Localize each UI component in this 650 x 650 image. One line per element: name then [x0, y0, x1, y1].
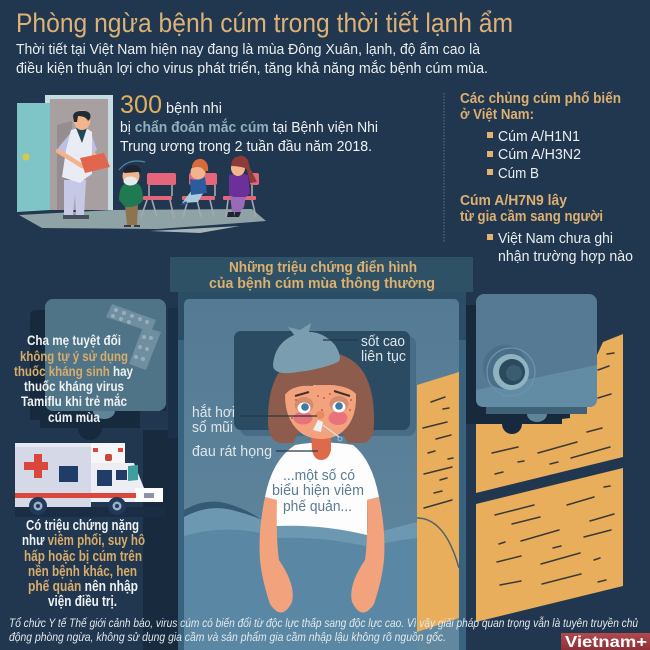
symptoms heading band — [170, 257, 473, 292]
advice text: hospitalisation: nền bệnh khác, hen — [28, 564, 137, 580]
strains list: ở Việt Nam: — [460, 107, 534, 123]
strains list: Các chủng cúm phổ biến — [460, 91, 621, 107]
pillow — [234, 331, 416, 436]
warning text: antibiotics: thuốc kháng virus — [24, 378, 124, 394]
blanket — [184, 502, 459, 650]
ice bag — [273, 323, 340, 373]
arms — [260, 497, 384, 613]
doctor — [58, 110, 110, 219]
strains list: Cúm A/H3N2 — [498, 147, 581, 163]
nose and tissue — [313, 411, 342, 441]
strains list: từ gia cầm sang người — [460, 209, 603, 225]
statistic: 300 patients — [120, 91, 378, 155]
warning text: antibiotics — [14, 332, 133, 425]
warning text: antibiotics: Cha mẹ tuyệt đối — [27, 332, 121, 348]
warning text: antibiotics: Tamiflu khi trẻ mắc — [21, 392, 127, 409]
hair — [268, 352, 374, 443]
strains list: nhận trường hợp nào — [498, 249, 633, 265]
advice text: hospitalisation: phế quản nên nhập — [28, 579, 138, 595]
left bedside table with pills — [30, 299, 166, 440]
freckles — [291, 393, 352, 419]
intro text — [16, 41, 488, 77]
shirt text: biểu hiện viêm — [272, 482, 364, 499]
right window — [476, 334, 623, 622]
symptom labels: sổ mũi — [192, 419, 233, 436]
door — [17, 103, 50, 212]
chairs — [141, 173, 259, 218]
statistic: 300 patients: Trung ương trong 2 tuần đầu năm 2018. — [120, 139, 372, 155]
symptom labels: hắt hơi — [192, 404, 235, 421]
icon: pill blisters — [106, 304, 161, 370]
footnote: động phòng ngừa, không sử dụng gia cầm và sản phẩm gia cầm nhập lậu không rõ nguồn gốc. — [9, 632, 446, 644]
warning text: antibiotics: cúm mùa — [48, 409, 100, 425]
advice text: hospitalisation: hấp hoặc bị cúm trên — [24, 549, 142, 565]
seated boy — [180, 159, 208, 205]
window reflection on panel — [417, 372, 459, 650]
door frame and room — [45, 95, 113, 210]
strains list: Việt Nam chưa ghi — [498, 231, 613, 247]
strains list: Cúm A/H1N1 — [498, 129, 580, 145]
bed panel with sick girl — [184, 299, 459, 650]
leader lines — [240, 340, 358, 451]
advice text: hospitalisation: như viêm phổi, suy hô — [22, 533, 145, 549]
advice text: hospitalisation — [22, 518, 145, 610]
warning text: antibiotics: thuốc kháng sinh hay — [14, 363, 133, 379]
shirt text: phế quản... — [283, 498, 352, 515]
symptoms heading band: của bệnh cúm mùa thông thường — [209, 276, 435, 292]
statistic: 300 patients: bệnh nhi — [166, 101, 222, 117]
face — [285, 385, 356, 439]
statistic: 300 patients: bị chẩn đoán mắc cúm tại Bệnh viện Nhi — [120, 118, 378, 136]
strains list: Cúm B — [498, 166, 539, 182]
symptom labels — [192, 333, 406, 460]
advice text: hospitalisation: viện điều trị. — [48, 594, 117, 610]
ambulance — [15, 443, 165, 517]
warning text: antibiotics: không tự ý sử dụng — [20, 348, 128, 364]
seated girl — [227, 156, 257, 217]
cheeks — [294, 411, 348, 425]
symptom labels: đau rát họng — [192, 443, 272, 460]
shirt text: ...một số có — [283, 467, 355, 484]
neck — [311, 434, 331, 460]
strains list: Cúm A/H7N9 lây — [460, 193, 567, 209]
intro text: Thời tiết tại Việt Nam hiện nay đang là mùa Đông Xuân, lạnh, độ ẩm cao là — [16, 41, 481, 58]
intro text: điều kiện thuận lợi cho virus phát triển, tăng khả năng mắc bệnh cúm mùa. — [16, 60, 488, 77]
shirt text — [272, 467, 364, 515]
symptoms heading band: Những triệu chứng điển hình — [229, 260, 417, 276]
right bedside table / safe — [466, 294, 597, 434]
footnote — [9, 617, 639, 644]
illustration: doctor and waiting children — [17, 95, 266, 233]
strains list — [460, 91, 633, 265]
floor — [19, 209, 266, 229]
symptom labels: liên tục — [361, 348, 406, 365]
room wall strips — [143, 292, 466, 650]
eyes — [294, 391, 350, 414]
statistic: 300 patients: 300 — [120, 91, 162, 119]
bangs — [284, 368, 358, 396]
title: Phòng ngừa bệnh cúm trong thời tiết lạnh ẩm — [16, 8, 513, 38]
advice text: hospitalisation: Có triệu chứng nặng — [26, 518, 139, 534]
child with mask — [119, 161, 145, 227]
shirt — [265, 442, 379, 540]
symptom labels: sốt cao — [361, 333, 405, 350]
